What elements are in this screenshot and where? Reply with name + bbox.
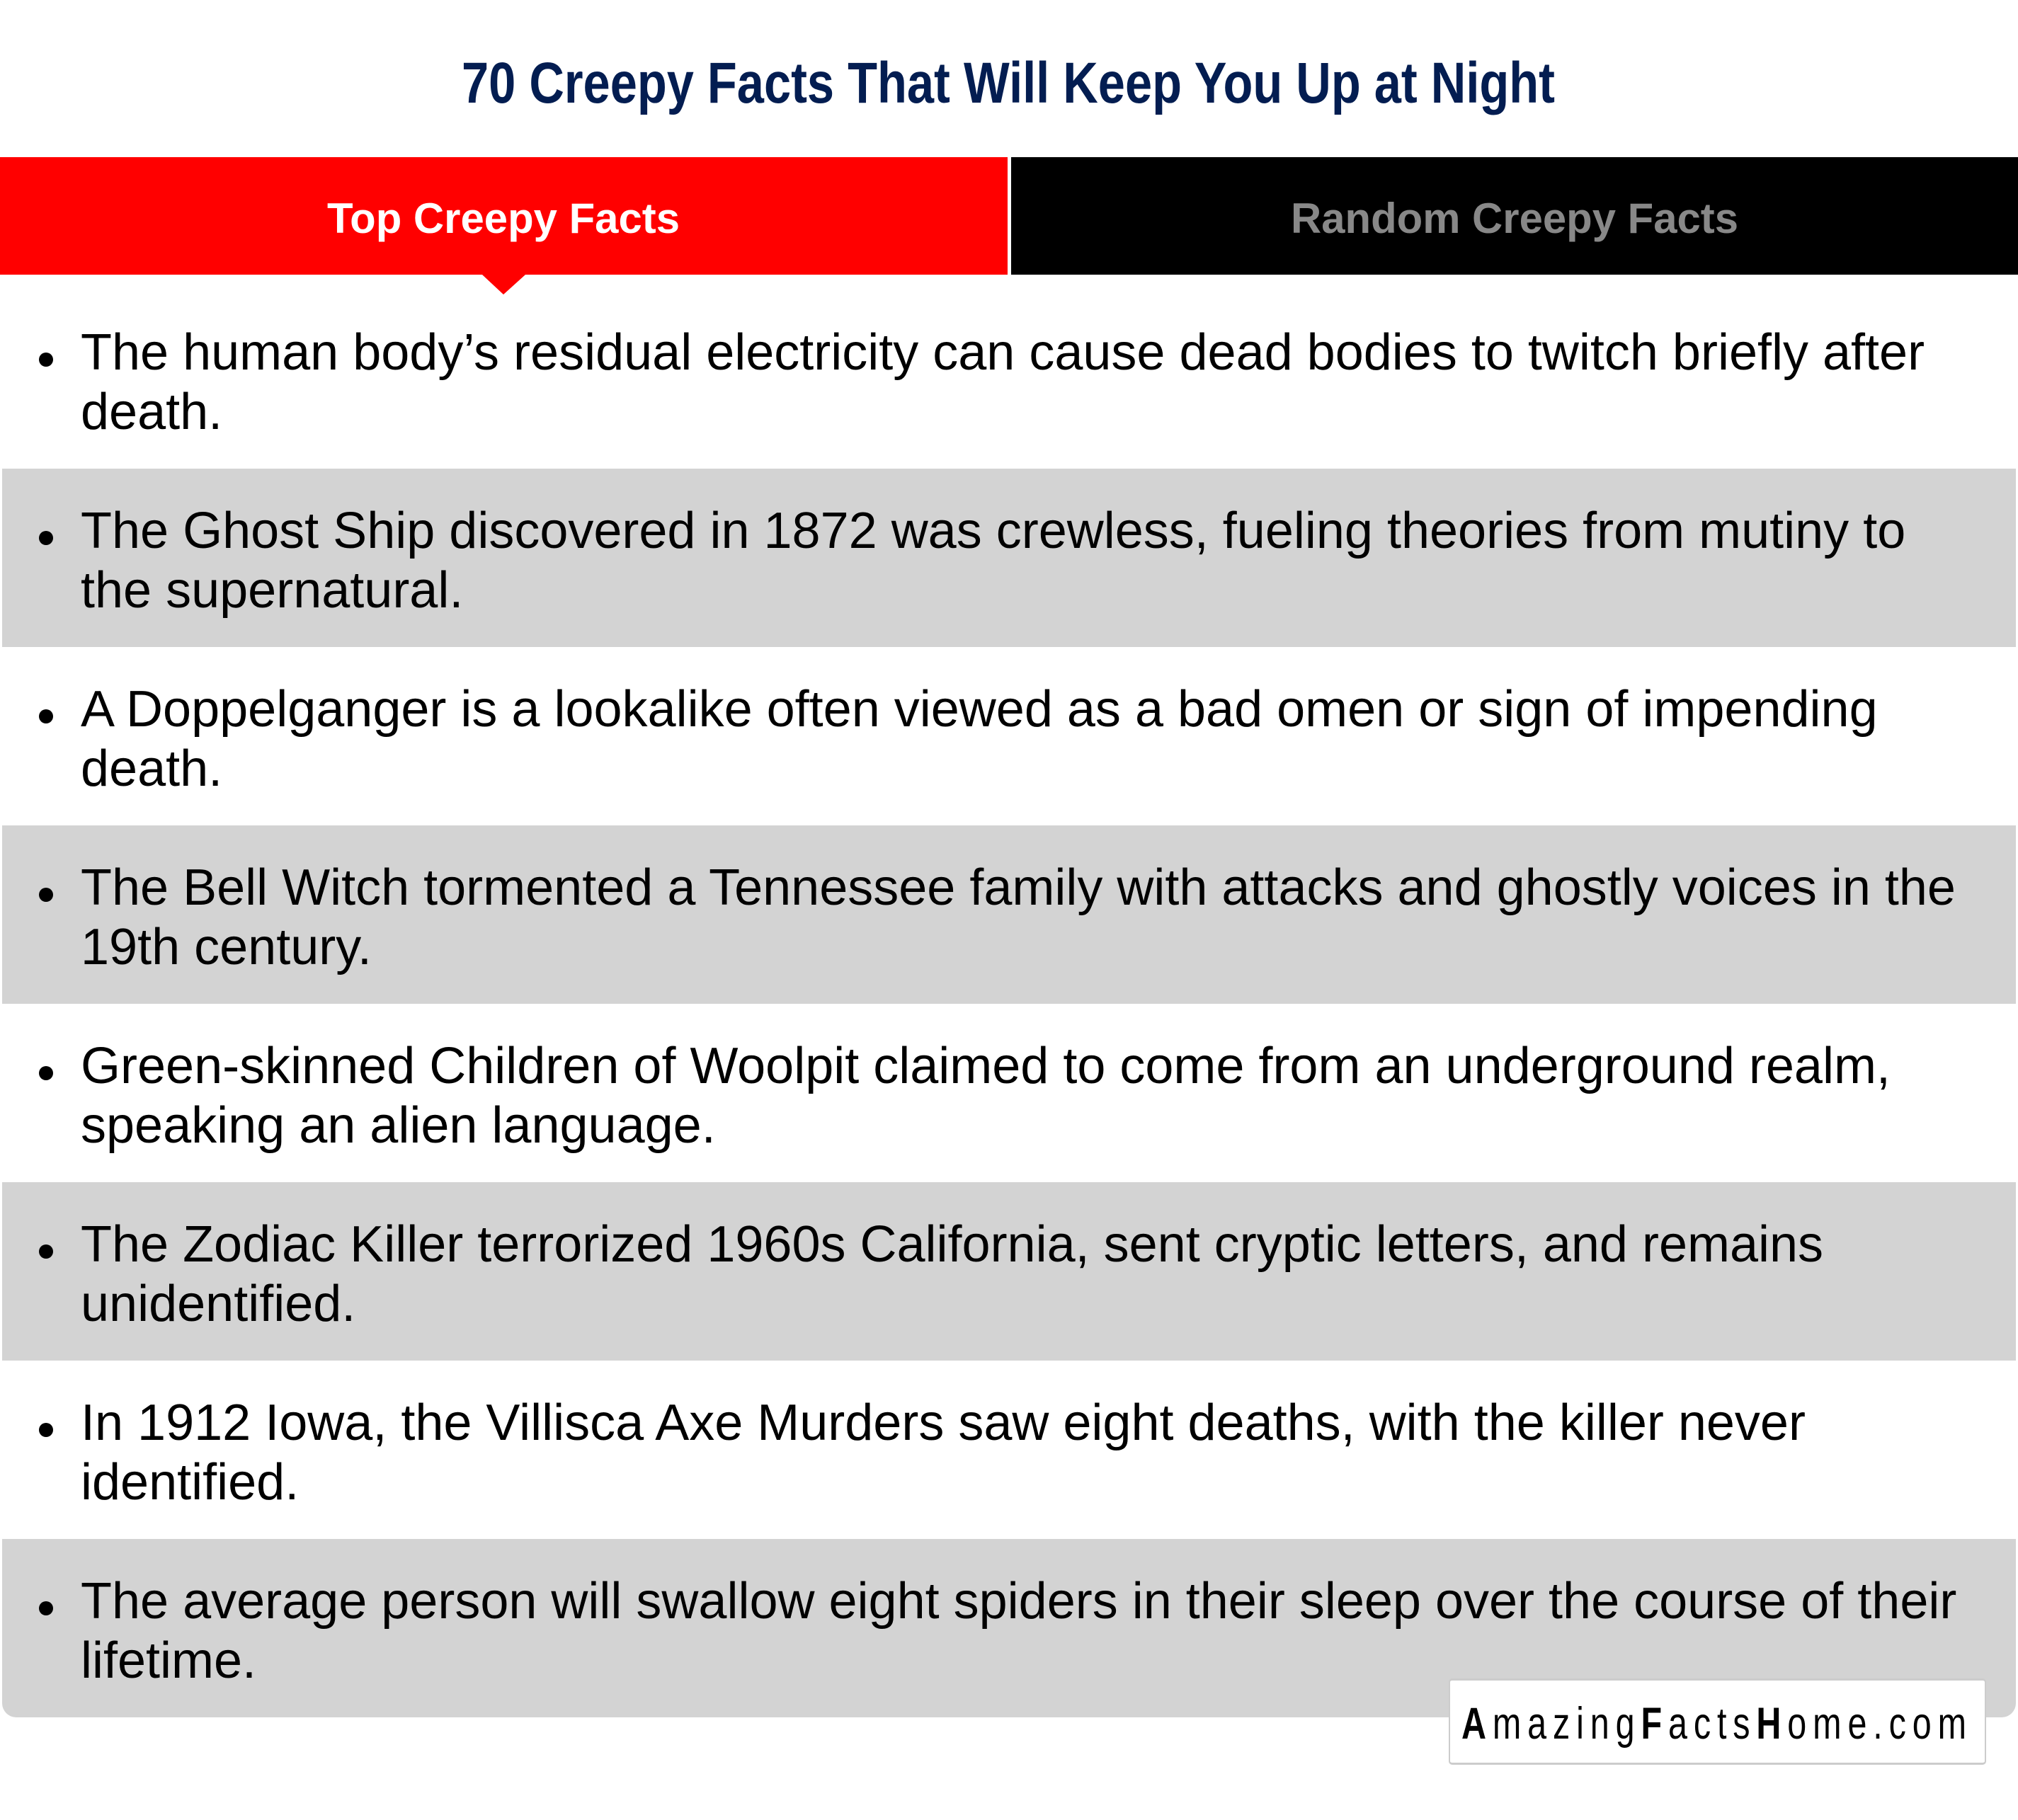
watermark: AmazingFactsHome.com — [1461, 1698, 1966, 1748]
fact row 5: speaking an alien language. — [81, 1097, 716, 1154]
fact row 5 — [39, 1038, 1891, 1154]
fact row 1 — [39, 324, 1925, 440]
fact row 6: The Zodiac Killer terrorized 1960s California, sent cryptic letters, and remains — [81, 1216, 1823, 1273]
fact row 8: The average person will swallow eight spiders in their sleep over the course of their — [81, 1573, 1956, 1630]
watermark — [1449, 1678, 1986, 1765]
fact row 3 — [39, 681, 1878, 797]
fact row 8: lifetime. — [81, 1632, 256, 1689]
tab: top creepy facts — [0, 157, 1008, 275]
fact row 1: The human body’s residual electricity can cause dead bodies to twitch briefly after — [81, 324, 1925, 381]
tab: top creepy facts: Top Creepy Facts — [327, 195, 680, 242]
title: 70 Creepy Facts That Will Keep You Up at Night — [462, 51, 1555, 115]
fact row 2: the supernatural. — [81, 562, 463, 619]
fact row 1: death. — [81, 384, 222, 440]
fact row 3: death. — [81, 740, 222, 797]
fact row 2 — [2, 469, 2016, 647]
fact row 6 — [2, 1182, 2016, 1361]
fact row 7 — [39, 1395, 1806, 1511]
fact row 3: A Doppelganger is a lookalike often viewed as a bad omen or sign of impending — [81, 681, 1878, 738]
fact row 2: The Ghost Ship discovered in 1872 was crewless, fueling theories from mutiny to — [81, 503, 1905, 559]
tab: random creepy facts: Random Creepy Facts — [1291, 195, 1738, 242]
icon: tab pointer — [482, 275, 525, 294]
tab: random creepy facts — [1011, 157, 2018, 275]
fact row 4: The Bell Witch tormented a Tennessee family with attacks and ghostly voices in the — [81, 859, 1956, 916]
fact row 7: In 1912 Iowa, the Villisca Axe Murders saw eight deaths, with the killer never — [81, 1395, 1806, 1451]
fact row 6: unidentified. — [81, 1276, 355, 1332]
fact row 4: 19th century. — [81, 919, 372, 975]
fact row 4 — [2, 825, 2016, 1004]
fact row 8 — [2, 1539, 2016, 1717]
fact row 7: identified. — [81, 1454, 299, 1511]
fact row 5: Green-skinned Children of Woolpit claimed to come from an underground realm, — [81, 1038, 1891, 1094]
